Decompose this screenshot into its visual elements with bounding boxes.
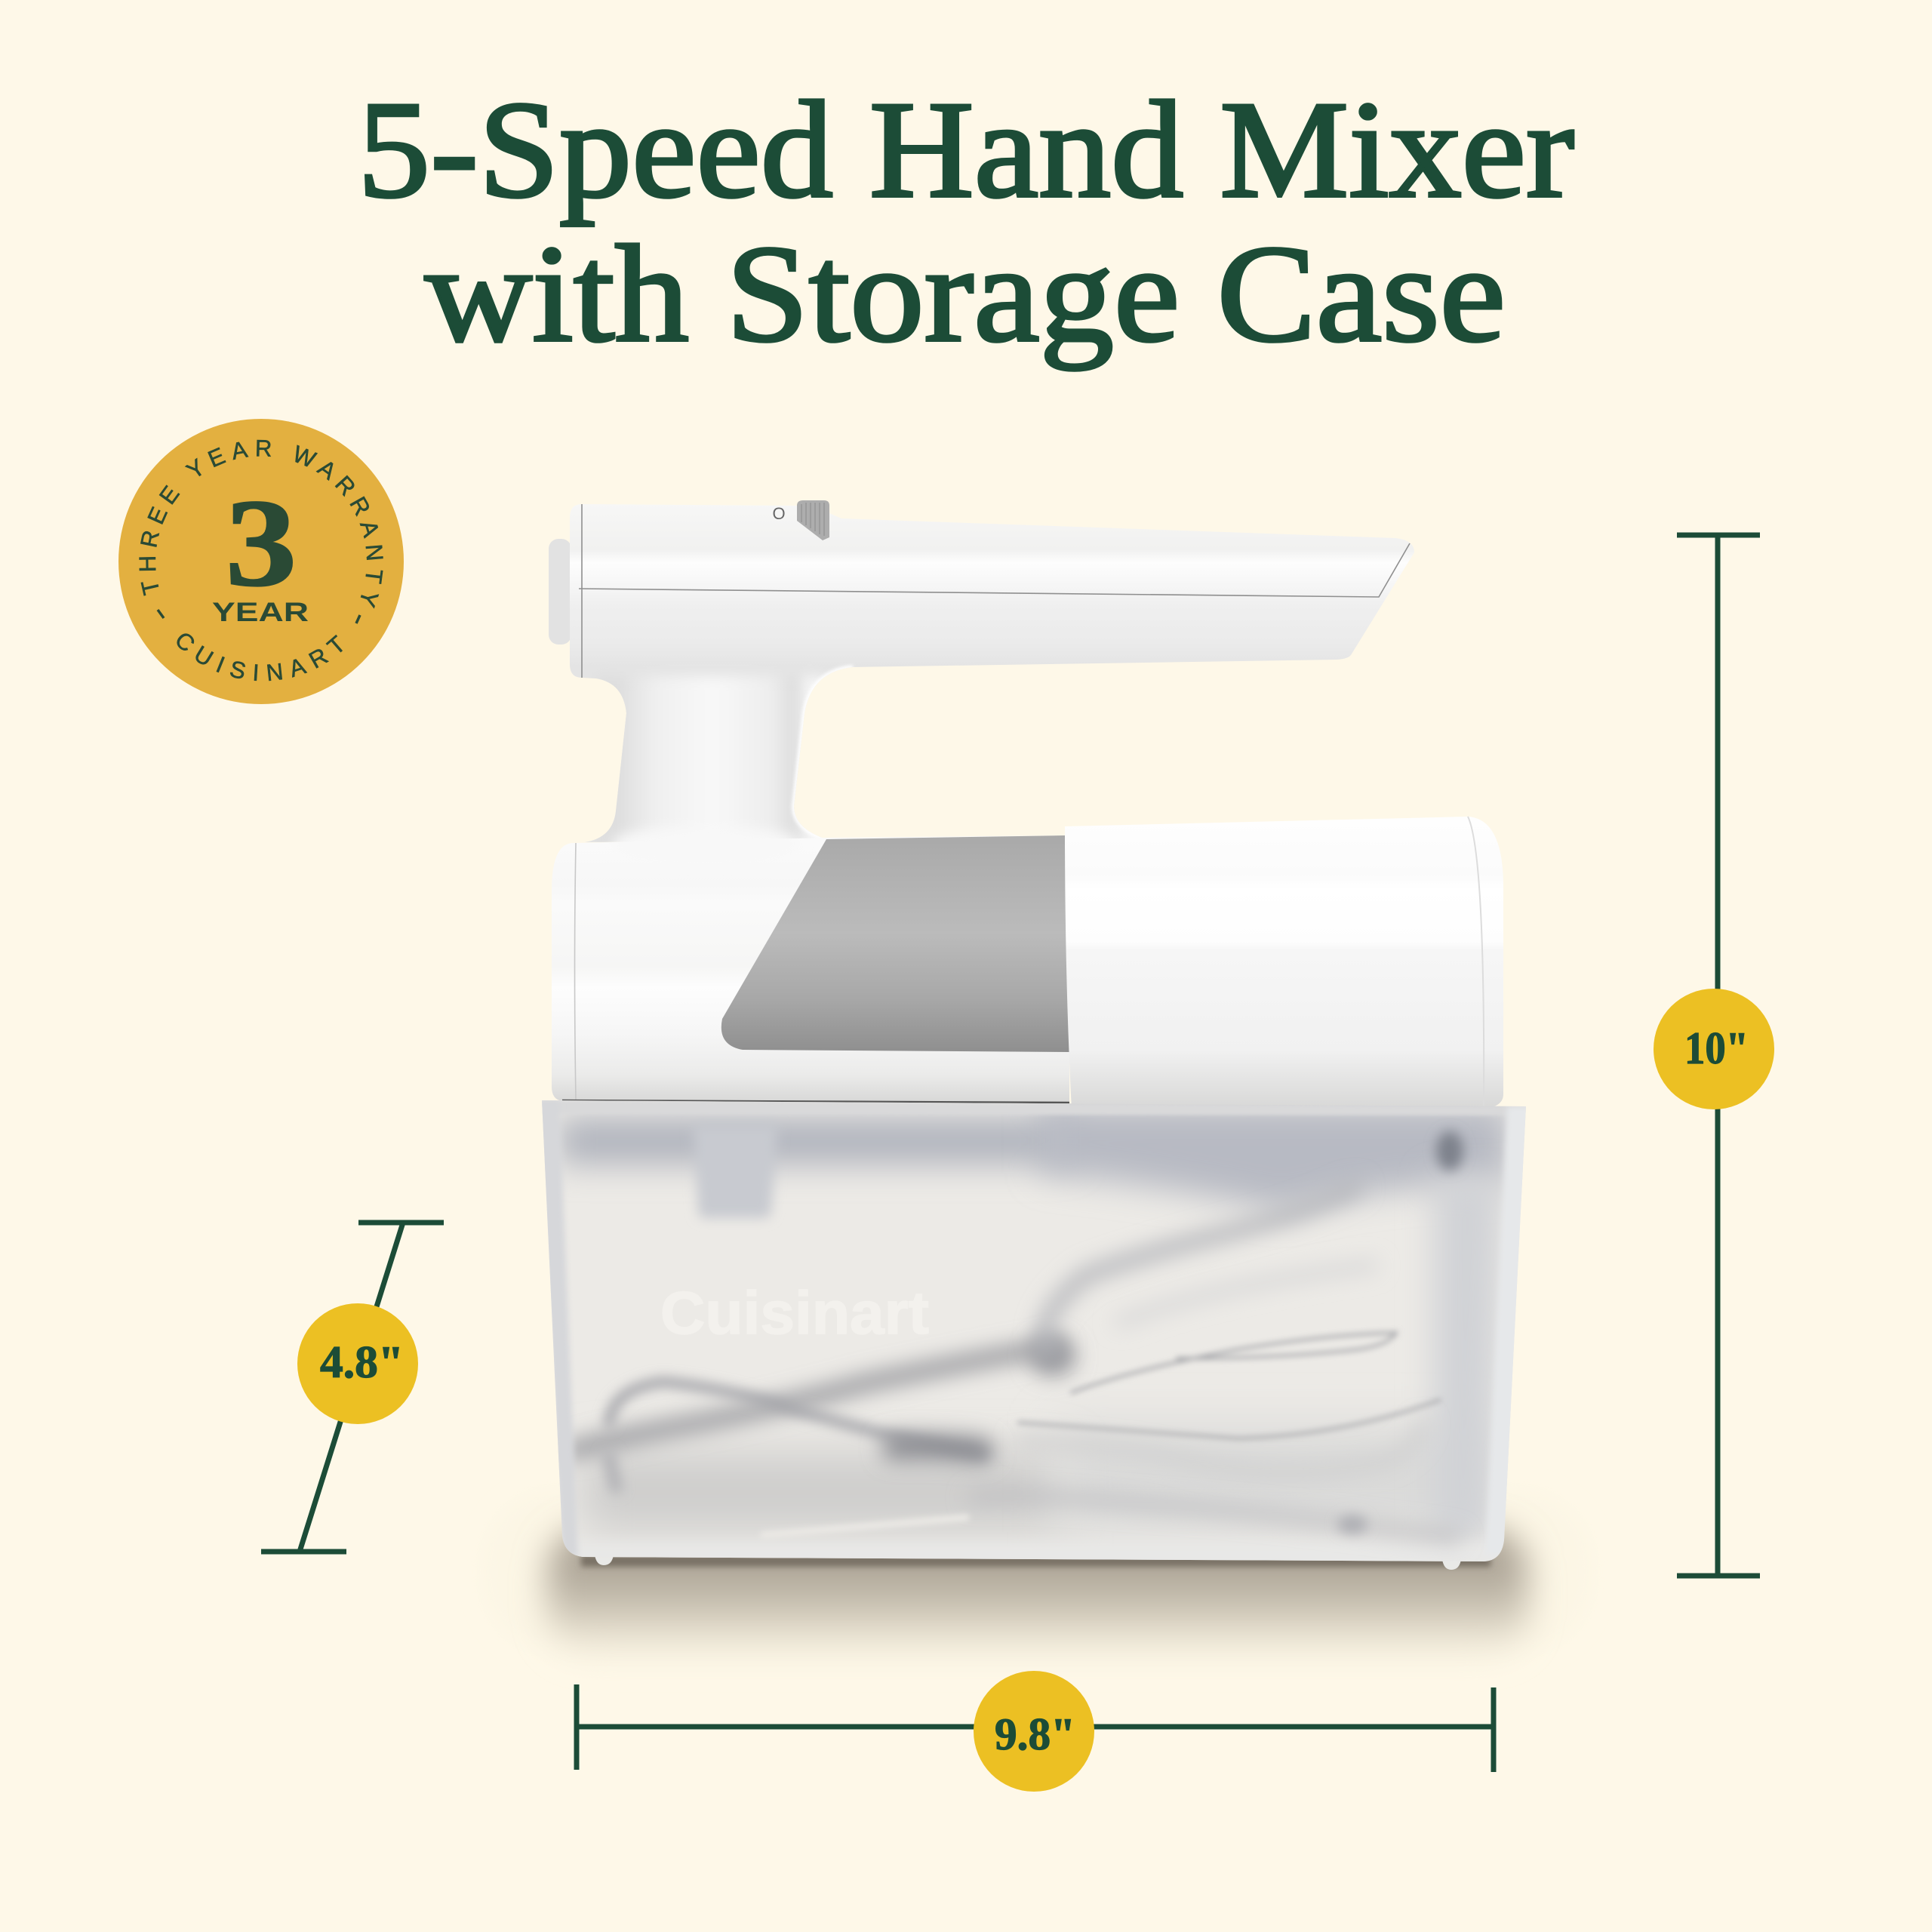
blurred contents <box>536 1100 1532 1566</box>
whisk wires <box>572 1188 1457 1538</box>
side button <box>549 539 571 645</box>
dimension: height 10 inches <box>1654 535 1774 1576</box>
rim left <box>542 1100 578 1555</box>
hook tab <box>694 1124 777 1218</box>
dimension: width 9.8 inches <box>577 1671 1494 1792</box>
title: with Storage Case <box>425 217 1506 371</box>
floor shadow <box>483 1491 1592 1653</box>
lower body <box>552 835 1069 1103</box>
hand mixer <box>549 498 1503 1109</box>
feet <box>595 1555 1461 1570</box>
knob: speed control <box>797 500 829 540</box>
corner shadow <box>1436 1131 1463 1171</box>
rim right <box>1487 1106 1526 1551</box>
dimension: width 9.8 inches: 9.8" <box>995 1709 1075 1759</box>
case logo: Cuisinart <box>660 1279 929 1346</box>
title <box>358 72 1574 371</box>
handle seam <box>579 504 1410 678</box>
top band left <box>558 1118 1072 1164</box>
dimension: depth 4.8 inches: 4.8" <box>320 1337 404 1387</box>
warranty badge: 3 <box>226 473 297 612</box>
title: 5-Speed Hand Mixer <box>358 72 1574 226</box>
top band right <box>1041 1106 1509 1211</box>
upper housing and neck <box>558 498 1426 857</box>
warranty badge: YEAR <box>212 598 309 627</box>
dimension: height 10 inches: 10" <box>1684 1023 1749 1073</box>
case shell <box>542 1100 1526 1561</box>
grey panel <box>721 835 1069 1052</box>
lower greys <box>581 1453 1064 1532</box>
dimension: depth 4.8 inches <box>261 1223 444 1552</box>
bottom light strip <box>571 1552 1500 1561</box>
warranty badge <box>118 419 404 704</box>
rim top <box>542 1100 1526 1115</box>
speed mark: O <box>772 504 786 523</box>
right inner shade <box>1434 1177 1502 1540</box>
storage case <box>536 1100 1532 1570</box>
warranty badge: THREE YEAR WARRANTY <box>139 439 383 608</box>
warranty badge: CUISINART <box>177 633 343 681</box>
front cylinder <box>1065 817 1503 1109</box>
